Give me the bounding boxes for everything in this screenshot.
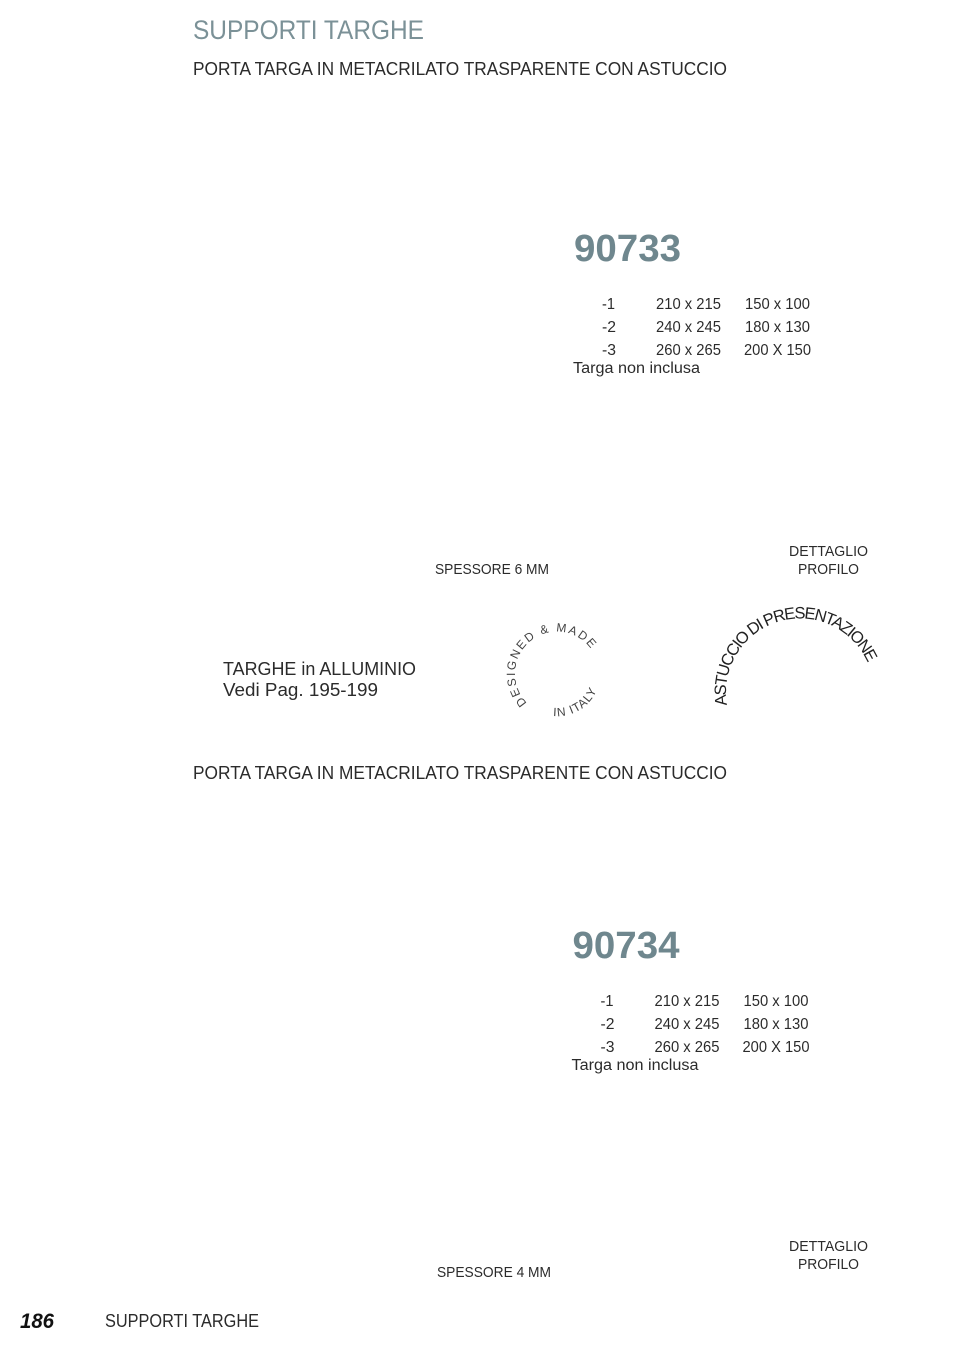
size table 90734: -2 (600, 1016, 614, 1033)
size table 90734: 240 x 245 (654, 1016, 720, 1033)
label: profile detail 1 (789, 543, 868, 578)
size table 90733: 260 x 265 (656, 342, 721, 359)
product code 90733: 90733 (574, 228, 681, 270)
size table 90734: 200 X 150 (742, 1039, 810, 1056)
size table 90734: 150 x 100 (744, 993, 809, 1010)
label: profile detail 2: PROFILO (798, 1256, 859, 1273)
label: profile detail 2: DETTAGLIO (789, 1238, 868, 1255)
product code 90734: 90734 (572, 925, 680, 967)
curved badge: designed and made in Italy: IN ITALY (554, 687, 596, 716)
size table 90734: 210 x 215 (654, 993, 720, 1010)
subtitle: product 90734: PORTA TARGA IN METACRILATO TRASPARENTE CON ASTUCCIO (193, 762, 727, 783)
size table 90734 (572, 993, 810, 1074)
size table 90734: -3 (600, 1039, 614, 1056)
size table 90733: -3 (602, 342, 616, 359)
label: thickness 6 mm: SPESSORE 6 MM (435, 561, 549, 578)
label: thickness 4 mm: SPESSORE 4 MM (437, 1264, 551, 1281)
size table 90733: 150 x 100 (745, 296, 810, 313)
subtitle: product 90733: PORTA TARGA IN METACRILATO TRASPARENTE CON ASTUCCIO (193, 58, 727, 79)
title: SUPPORTI TARGHE (193, 15, 424, 45)
size table 90733: 180 x 130 (745, 319, 810, 336)
size table 90734: Targa non inclusa (572, 1057, 699, 1074)
size table 90733: Targa non inclusa (573, 360, 700, 377)
size table 90733: 200 X 150 (744, 342, 811, 359)
size table 90734: -1 (600, 993, 614, 1010)
size table 90733: 240 x 245 (656, 319, 721, 336)
curved label: presentation case: ASTUCCIO DI PRESENTAZIONE (714, 606, 878, 706)
label: profile detail 1: DETTAGLIO (789, 543, 868, 560)
label: profile detail 1: PROFILO (798, 561, 859, 578)
size table 90733: -1 (602, 296, 615, 313)
label: profile detail 2 (789, 1238, 868, 1273)
size table 90734: 180 x 130 (744, 1016, 809, 1033)
size table 90733: -2 (602, 319, 616, 336)
size table 90733: 210 x 215 (656, 296, 721, 313)
note: aluminium plates: TARGHE in ALLUMINIO (223, 658, 416, 679)
page number: 186 (20, 1310, 54, 1333)
note: aluminium plates: Vedi Pag. 195-199 (223, 679, 378, 700)
size table 90734: 260 x 265 (654, 1039, 720, 1056)
note: aluminium plates (223, 658, 416, 700)
size table 90733 (573, 296, 811, 377)
curved badge: designed and made in Italy: DESIGNED & MADE (506, 623, 597, 708)
footer section name: SUPPORTI TARGHE (105, 1310, 259, 1331)
